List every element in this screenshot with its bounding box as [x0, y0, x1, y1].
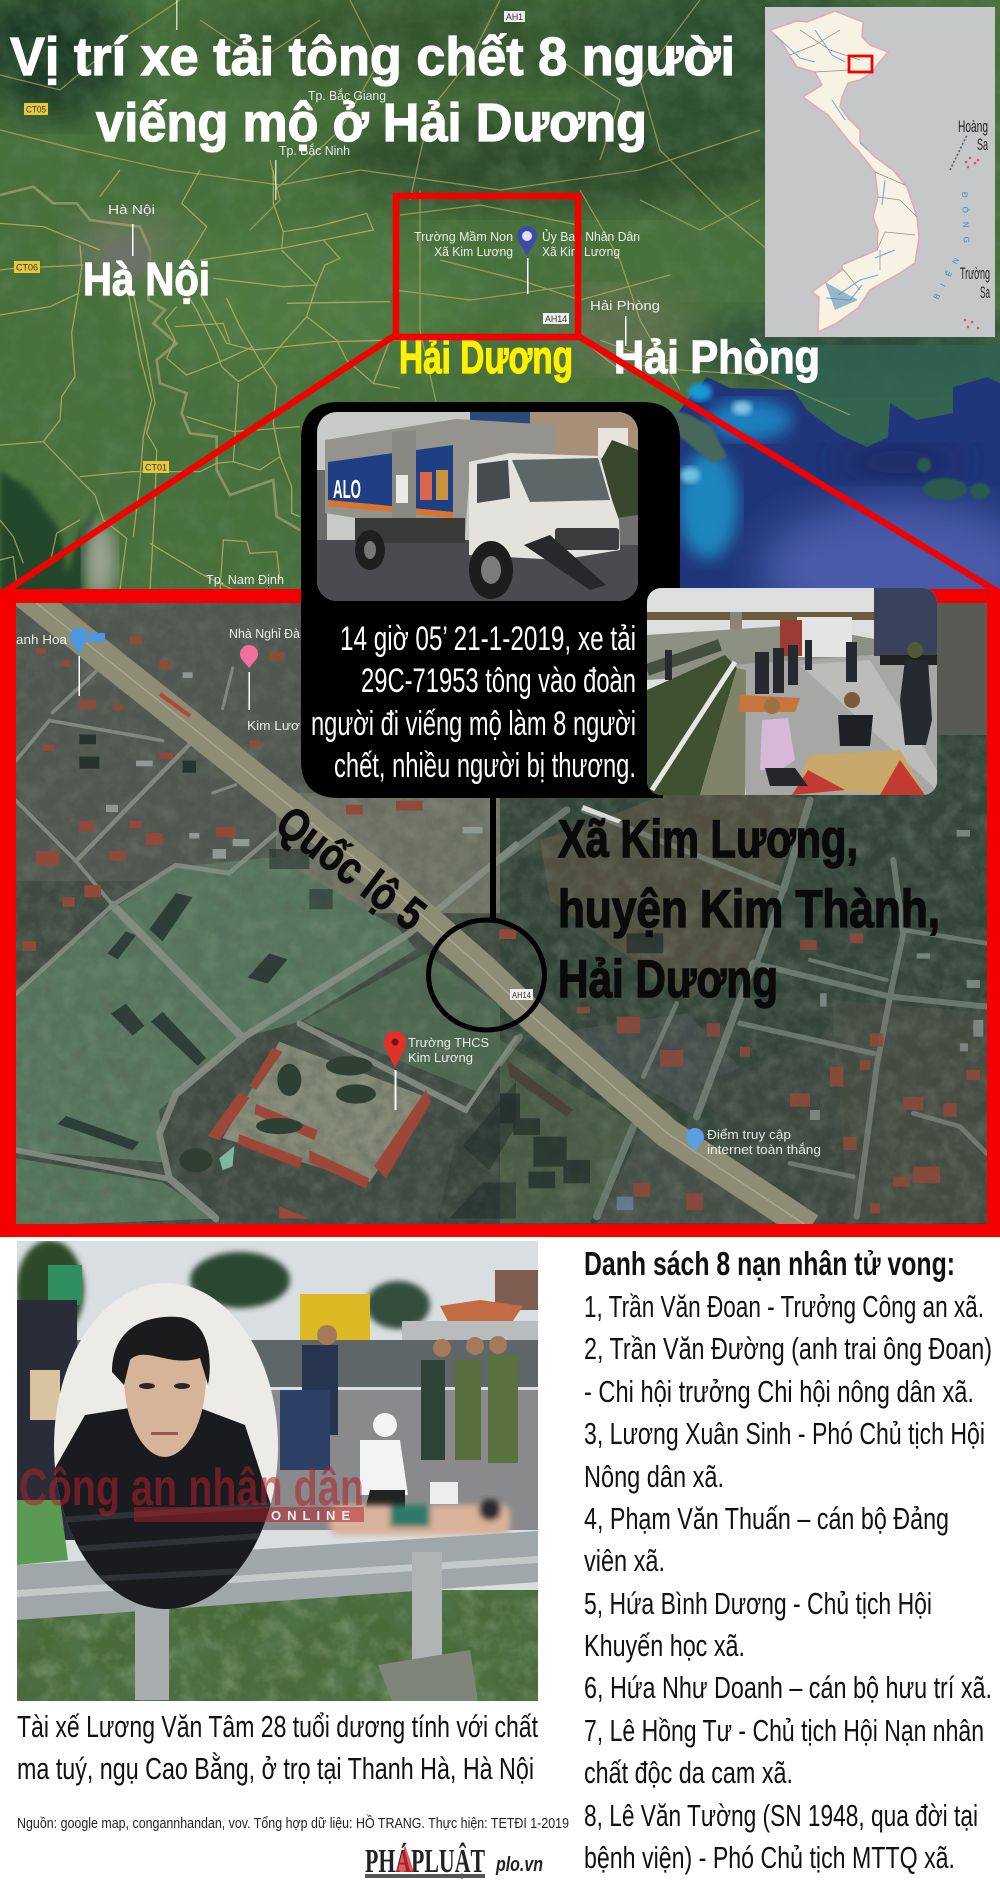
- map labels: [14, 0, 660, 587]
- inset map: Vietnam locator: BIỂN: [932, 248, 965, 301]
- map labels: Tp. Bắc Ninh: [279, 143, 350, 158]
- map labels: Kim Lươ: [247, 718, 300, 733]
- forest patch: [0, 470, 95, 600]
- map labels: Điểm truy cập: [707, 1127, 791, 1142]
- islands: [923, 478, 967, 500]
- list items: Khuyến học xã.: [584, 1628, 745, 1663]
- city labels: Hải Dương: [399, 331, 573, 383]
- driver caption: [17, 1709, 538, 1786]
- road network: west, traced: [0, 170, 400, 590]
- locator red box: [849, 56, 872, 72]
- title: viếng mộ ở Hải Dương: [96, 93, 647, 153]
- callout text: [311, 620, 636, 785]
- map labels: anh Hoa: [16, 632, 68, 647]
- callout black box: [301, 402, 680, 798]
- river: [0, 187, 300, 530]
- driver caption: Tài xế Lương Văn Tâm 28 tuổi dương tính với chất: [17, 1709, 538, 1744]
- list items: Nông dân xã.: [584, 1459, 724, 1494]
- map labels: Ủy Ban Nhân Dân: [542, 229, 640, 244]
- map labels: AH1: [506, 12, 523, 22]
- red frame: [0, 589, 1000, 1237]
- map labels: AH14: [545, 314, 567, 324]
- logo: Pháp Luật plo.vn: plo.vn: [495, 1854, 543, 1876]
- callout text: chết, nhiều người bị thương.: [334, 747, 636, 785]
- truck photo: [317, 412, 638, 601]
- city labels: [83, 253, 820, 383]
- map labels: Xã Kim Lương: [434, 244, 513, 259]
- victim list: [584, 1245, 992, 1875]
- map labels: CT01: [145, 462, 167, 472]
- map labels: internet toàn thắng: [707, 1142, 821, 1157]
- west roads and roofs: [16, 636, 516, 1218]
- road name label: Quốc lộ 5: [267, 795, 436, 940]
- crash scene photo: [647, 588, 937, 795]
- locator stem and circle: [428, 790, 544, 1030]
- west district, traced: [16, 600, 516, 1226]
- logo: Pháp Luật plo.vn: PHÁPLUẬT: [365, 1842, 485, 1880]
- map labels: Xã Kim Lương: [542, 244, 620, 259]
- title: Vị trí xe tải tông chết 8 người: [10, 27, 735, 87]
- coastal tint: [760, 345, 1000, 447]
- crouching woman: [838, 715, 873, 746]
- grass: [17, 1590, 538, 1701]
- list items: viên xã.: [584, 1543, 665, 1578]
- commune label: Hải Dương: [558, 950, 778, 1009]
- driver portrait oval: [54, 1283, 279, 1609]
- east district, traced: [500, 735, 987, 1224]
- map labels: CT05: [26, 104, 46, 114]
- map labels: Nhà Nghỉ Đà: [229, 626, 301, 641]
- road network: upper: [0, 0, 850, 416]
- map labels: Trường Mầm Non: [414, 229, 513, 244]
- map labels: Hải Phòng: [590, 298, 660, 313]
- map labels: CT06: [16, 262, 38, 272]
- satellite map: northern Vietnam: [0, 0, 1000, 640]
- officers: [302, 1325, 518, 1463]
- commune label: [558, 810, 940, 1009]
- peninsula: [672, 410, 727, 463]
- map labels: Hà Nội: [108, 202, 155, 217]
- blurred body: [330, 1499, 510, 1535]
- callout text: 29C-71953 tông vào đoàn: [361, 662, 636, 700]
- driver photo: ONLINE: [271, 1508, 356, 1523]
- map labels: Trường THCS: [408, 1035, 489, 1050]
- Hanoi urban patch: [104, 238, 152, 278]
- map labels: AH14: [512, 990, 531, 1000]
- city labels: Hải Phòng: [614, 331, 820, 383]
- inset map: Vietnam locator: [765, 7, 995, 337]
- kneeling woman: [760, 718, 795, 770]
- list items: [584, 1289, 992, 1875]
- grey block east of photo: [937, 603, 987, 735]
- guardrail: [17, 1531, 538, 1620]
- callout text: người đi viếng mộ làm 8 người: [311, 705, 636, 743]
- title: [10, 27, 735, 153]
- truck photo: ALO: [333, 474, 361, 504]
- east roads and roofs: [500, 800, 987, 1217]
- source note: Nguồn: google map, congannhandan, vov. Tổng hợp dữ liệu: HỒ TRANG. Thực hiện: TETĐI 1-2019: [17, 1814, 569, 1832]
- highway: [20, 590, 810, 1228]
- zoom lines and red box on map: [4, 196, 998, 592]
- watermark: Công an nhân dân: [19, 1459, 364, 1517]
- driver caption: ma tuý, ngụ Cao Bằng, ở trọ tại Thanh Hà, Hà Nội: [17, 1751, 534, 1786]
- commune label: Xã Kim Lương,: [558, 810, 858, 869]
- map labels: [16, 626, 821, 1157]
- city labels: Hà Nội: [83, 253, 210, 305]
- sea: [672, 377, 1000, 589]
- callout text: 14 giờ 05’ 21-1-2019, xe tải: [340, 620, 636, 658]
- driver photo: [16, 1240, 538, 1701]
- detail satellite map: Kim Lương: [16, 590, 993, 1228]
- inset map: Vietnam locator: ĐÔNG: [960, 192, 971, 252]
- map labels: Tp. Bắc Giang: [308, 88, 386, 103]
- inset map: Vietnam locator: Sa: [977, 135, 988, 154]
- list items: chất độc da cam xã.: [584, 1755, 793, 1790]
- map labels: Tp. Nam Định: [206, 572, 284, 587]
- map labels: Kim Lương: [408, 1050, 473, 1065]
